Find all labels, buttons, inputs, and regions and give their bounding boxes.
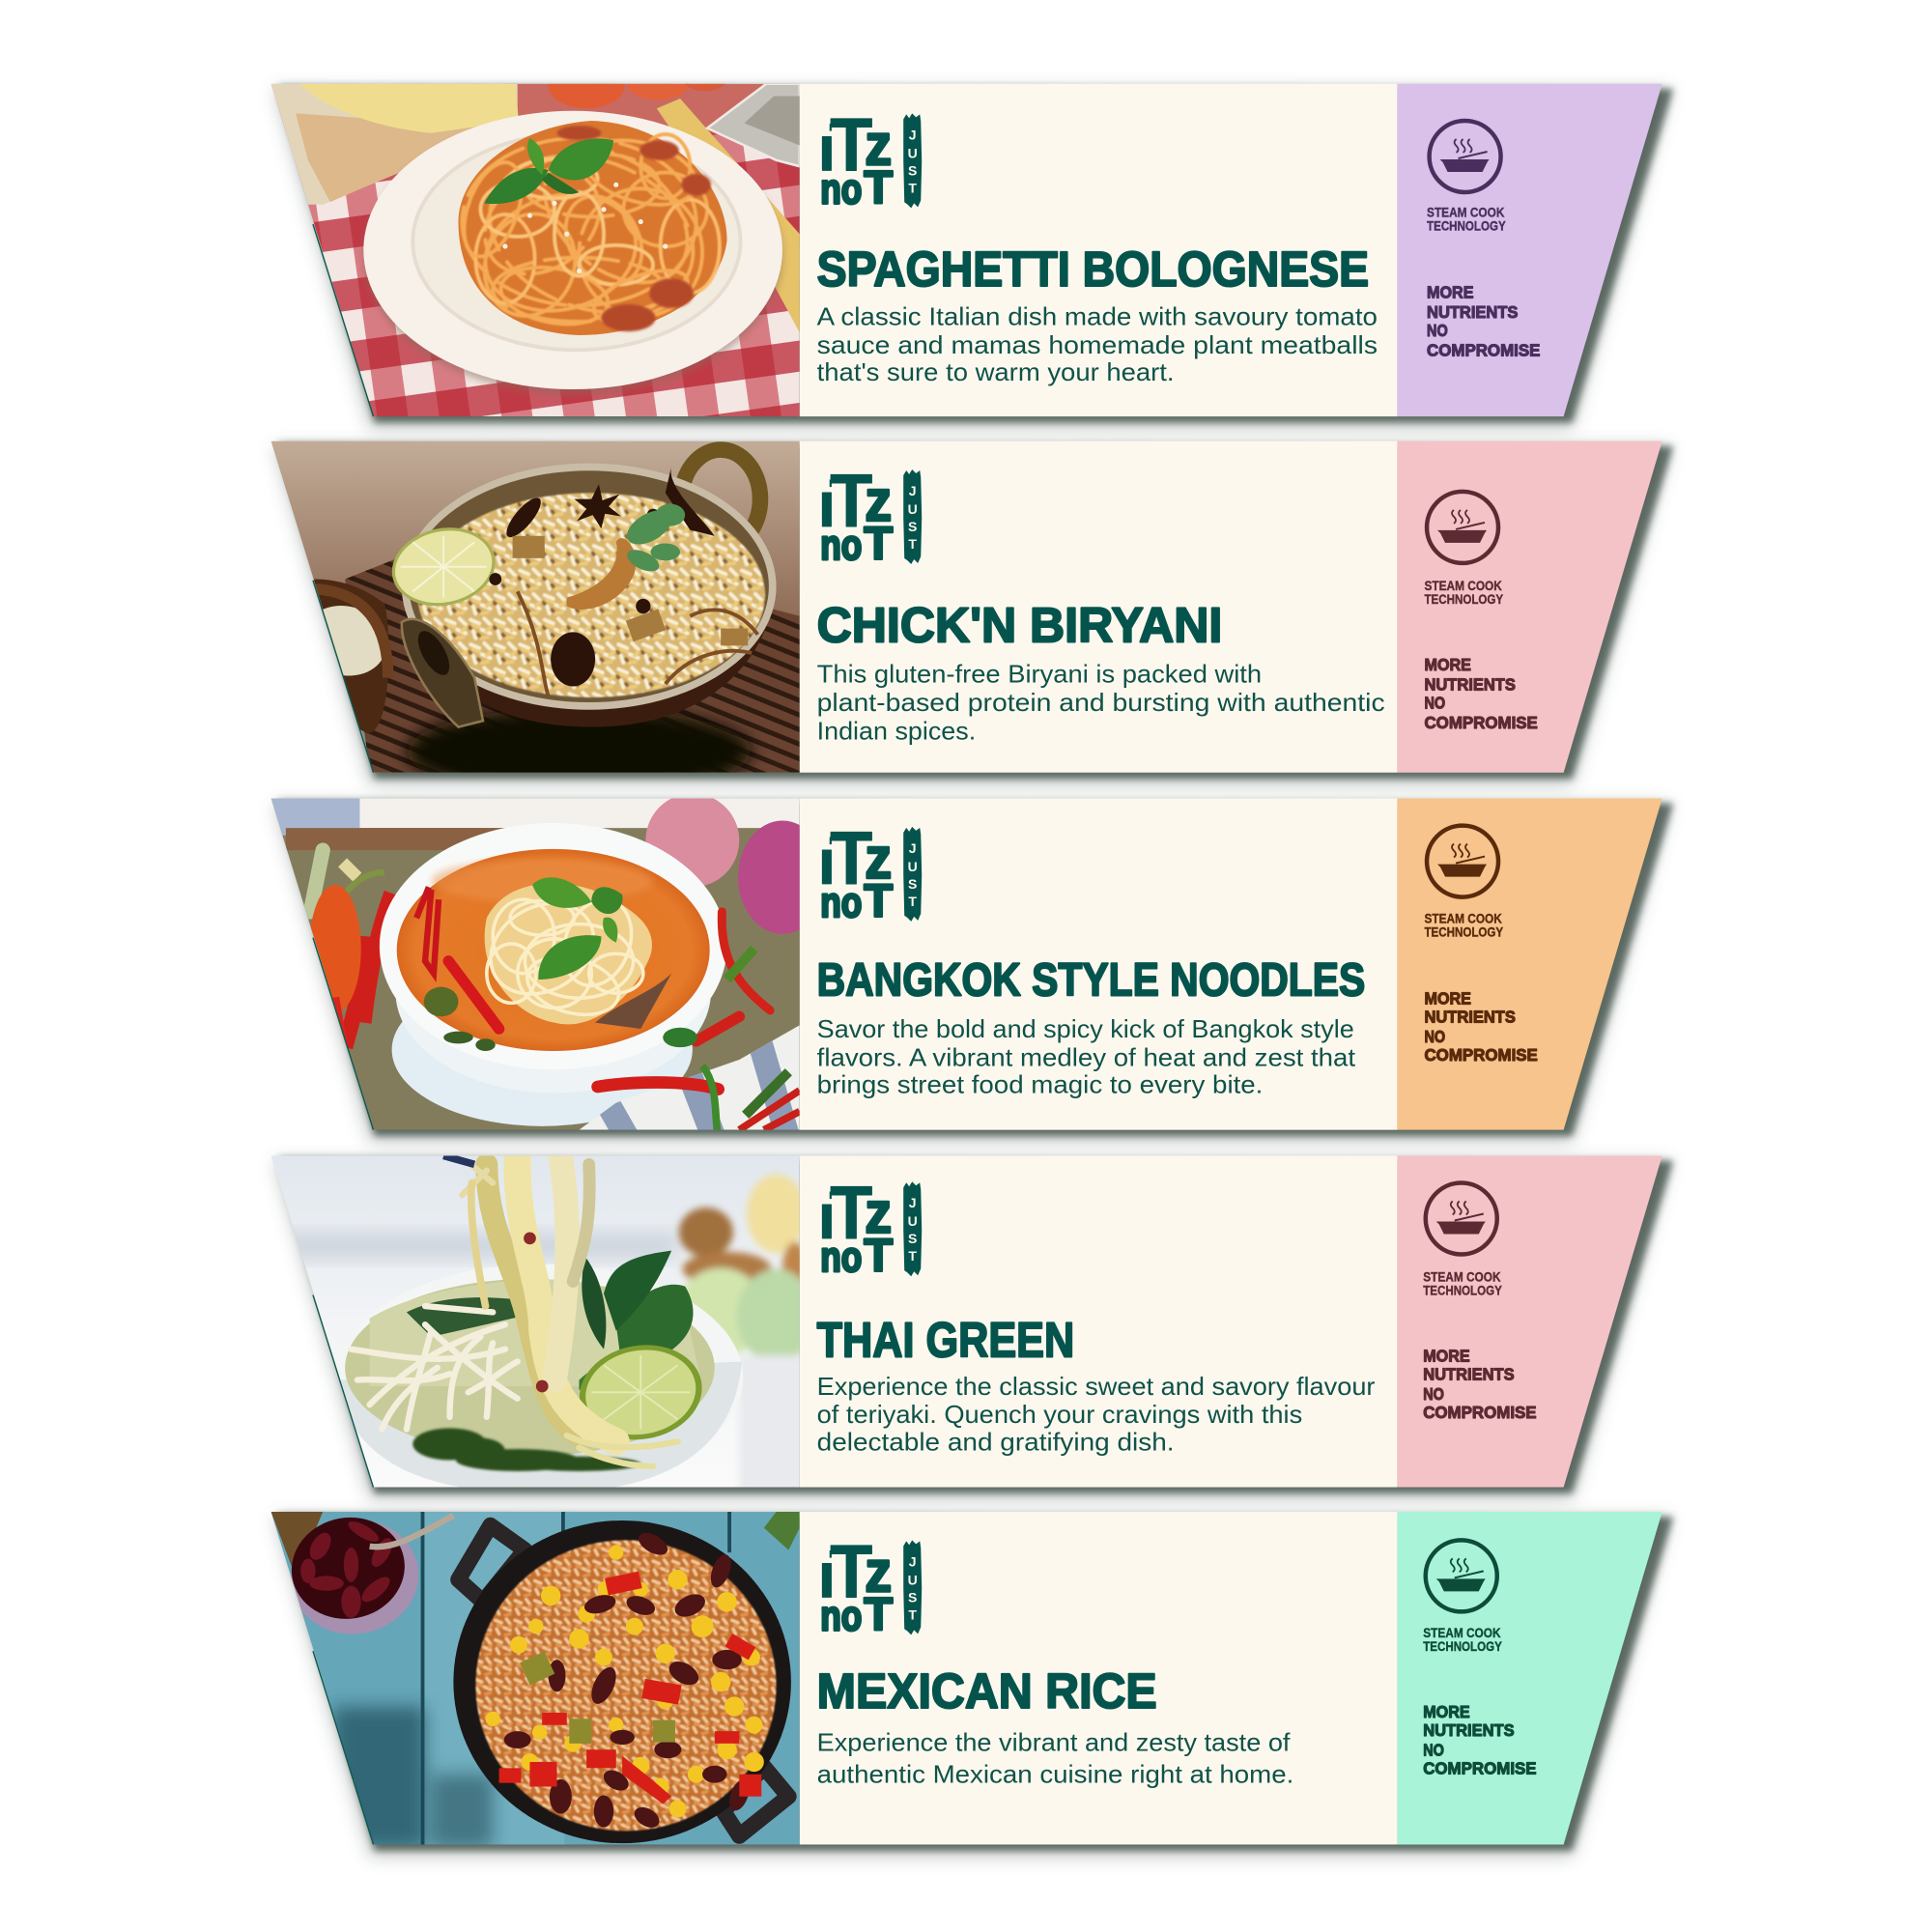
text panel background <box>800 1512 1397 1844</box>
icon: steam cook bowl <box>1430 121 1501 192</box>
side panel: mint <box>1397 1512 1662 1844</box>
label: steam cook technology <box>1423 1269 1502 1298</box>
logo: iTz noT Just: T <box>830 458 872 543</box>
logo: iTz noT Just <box>813 1528 922 1640</box>
logo: iTz noT Just: JUST <box>908 1553 918 1622</box>
claim: more nutrients no compromise: NUTRIENTS <box>1427 302 1519 322</box>
logo: iTz noT Just: T <box>830 1528 872 1613</box>
dish title: MEXICAN RICE <box>817 1663 1157 1719</box>
label: steam cook technology: TECHNOLOGY <box>1427 218 1506 234</box>
claim: more nutrients no compromise: COMPROMISE <box>1423 1403 1537 1422</box>
logo: iTz noT Just: no <box>820 879 862 926</box>
label: steam cook technology: STEAM COOK <box>1423 1625 1501 1640</box>
dish title: BANGKOK STYLE NOODLES <box>817 954 1365 1007</box>
logo: iTz noT Just: no <box>820 1592 862 1639</box>
claim: more nutrients no compromise: NO <box>1424 1027 1445 1046</box>
label: steam cook technology: TECHNOLOGY <box>1423 1283 1502 1298</box>
logo: iTz noT Just <box>813 1170 922 1282</box>
logo: iTz noT Just <box>813 101 922 213</box>
soft shadows behind cards <box>273 86 1673 1857</box>
logo: iTz noT Just: no <box>820 1234 862 1281</box>
claim: more nutrients no compromise: COMPROMISE <box>1423 1759 1537 1778</box>
side panel: orange <box>1397 799 1662 1130</box>
logo: iTz noT Just <box>813 458 922 570</box>
icon: steam cook bowl <box>1426 1540 1497 1611</box>
dish title: THAI GREEN <box>817 1312 1074 1367</box>
claim: more nutrients no compromise <box>1423 1702 1537 1778</box>
logo: iTz noT Just: i <box>818 469 836 540</box>
description: delectable and gratifying dish. <box>817 1427 1175 1456</box>
logo: iTz noT Just: no <box>820 522 862 569</box>
logo: iTz noT Just: JUST <box>908 483 918 552</box>
label: steam cook technology: STEAM COOK <box>1423 1269 1501 1285</box>
description: of teriyaki. Quench your cravings with this <box>817 1400 1302 1429</box>
icon: steam cook bowl <box>1427 492 1498 563</box>
description: Indian spices. <box>817 716 976 745</box>
panel: mexican rice <box>271 1506 1662 1848</box>
logo: iTz noT Just: JUST <box>908 1195 918 1264</box>
description: flavors. A vibrant medley of heat and zest that <box>817 1042 1356 1071</box>
claim: more nutrients no compromise: NUTRIENTS <box>1423 1720 1515 1740</box>
logo: iTz noT Just: JUST <box>908 840 918 909</box>
logo: iTz noT Just: T <box>864 1231 893 1282</box>
icon: steam cook bowl <box>1426 1182 1497 1254</box>
description: authentic Mexican cuisine right at home. <box>817 1760 1293 1789</box>
logo: iTz noT Just: T <box>830 1170 872 1255</box>
claim: more nutrients no compromise: NUTRIENTS <box>1424 1008 1516 1027</box>
photo: thai green noodles <box>271 1155 815 1493</box>
claim: more nutrients no compromise: COMPROMISE <box>1424 713 1538 732</box>
logo: iTz noT Just: T <box>864 1589 893 1640</box>
panel: spaghetti bolognese <box>265 64 1662 416</box>
label: steam cook technology <box>1423 1625 1502 1654</box>
claim: more nutrients no compromise: NO <box>1423 1384 1444 1404</box>
label: steam cook technology: STEAM COOK <box>1427 204 1504 219</box>
logo: iTz noT Just: z <box>865 469 892 533</box>
claim: more nutrients no compromise: MORE <box>1423 1346 1470 1365</box>
logo: iTz noT Just: i <box>818 1539 836 1610</box>
photo: spaghetti on white plate <box>265 64 807 416</box>
label: steam cook technology: STEAM COOK <box>1424 578 1502 593</box>
logo: iTz noT Just: T <box>864 519 893 570</box>
description: plant-based protein and bursting with authentic <box>817 688 1385 717</box>
logo: iTz noT Just: z <box>865 1539 892 1604</box>
logo: iTz noT Just: z <box>865 112 892 177</box>
description <box>817 1014 1356 1098</box>
dish title: CHICK'N BIRYANI <box>817 598 1222 653</box>
label: steam cook technology: STEAM COOK <box>1424 910 1502 925</box>
logo: iTz noT Just: i <box>818 112 836 184</box>
logo: iTz noT Just: z <box>865 826 892 891</box>
description: sauce and mamas homemade plant meatballs <box>817 330 1378 359</box>
logo: iTz noT Just: T <box>864 876 893 927</box>
logo: iTz noT Just: T <box>830 815 872 900</box>
description <box>817 1372 1376 1456</box>
description <box>817 302 1378 386</box>
claim: more nutrients no compromise <box>1423 1346 1537 1422</box>
label: steam cook technology <box>1424 910 1504 939</box>
photo: orange noodle soup <box>271 793 827 1140</box>
label: steam cook technology: TECHNOLOGY <box>1424 591 1504 607</box>
claim: more nutrients no compromise: MORE <box>1423 1702 1470 1721</box>
photo: biryani in copper bowl <box>271 441 800 796</box>
description <box>817 660 1385 745</box>
panel: chick'n biryani <box>271 441 1662 796</box>
text panel background <box>800 441 1397 773</box>
label: steam cook technology <box>1427 204 1506 234</box>
text panel background <box>800 799 1397 1130</box>
panel: bangkok style noodles <box>271 793 1662 1140</box>
claim: more nutrients no compromise: COMPROMISE <box>1424 1045 1538 1065</box>
logo: iTz noT Just: no <box>820 165 862 213</box>
description: Savor the bold and spicy kick of Bangkok style <box>817 1014 1354 1043</box>
text panel background <box>800 1155 1397 1488</box>
side panel: pink <box>1397 1155 1662 1488</box>
logo: iTz noT Just: T <box>830 101 872 186</box>
description <box>817 1727 1293 1789</box>
claim: more nutrients no compromise: NUTRIENTS <box>1424 674 1516 694</box>
claim: more nutrients no compromise: NO <box>1423 1741 1444 1760</box>
logo: iTz noT Just <box>813 815 922 927</box>
claim: more nutrients no compromise <box>1424 989 1538 1065</box>
label: steam cook technology: TECHNOLOGY <box>1424 923 1504 939</box>
text panel background <box>800 84 1397 416</box>
logo: iTz noT Just: i <box>818 826 836 897</box>
description: brings street food magic to every bite. <box>817 1069 1263 1098</box>
label: steam cook technology <box>1424 578 1504 607</box>
panel: thai green <box>271 1155 1662 1493</box>
dish title: SPAGHETTI BOLOGNESE <box>817 242 1369 297</box>
side panel: lilac <box>1397 84 1662 416</box>
logo: iTz noT Just: JUST <box>908 127 918 195</box>
claim: more nutrients no compromise <box>1424 655 1538 732</box>
icon: steam cook bowl <box>1427 826 1498 897</box>
logo: iTz noT Just: T <box>864 162 893 213</box>
label: steam cook technology: TECHNOLOGY <box>1423 1638 1502 1654</box>
claim: more nutrients no compromise <box>1427 283 1540 360</box>
logo: iTz noT Just: i <box>818 1180 836 1252</box>
description: This gluten-free Biryani is packed with <box>817 660 1262 689</box>
claim: more nutrients no compromise: MORE <box>1424 655 1471 674</box>
side panel: pink <box>1397 441 1662 773</box>
claim: more nutrients no compromise: NUTRIENTS <box>1423 1365 1515 1384</box>
description: A classic Italian dish made with savoury tomato <box>817 302 1378 331</box>
logo: iTz noT Just: z <box>865 1180 892 1245</box>
description: that's sure to warm your heart. <box>817 357 1175 386</box>
claim: more nutrients no compromise: MORE <box>1427 283 1474 302</box>
claim: more nutrients no compromise: NO <box>1427 321 1448 340</box>
photo: mexican rice in skillet <box>271 1506 800 1848</box>
claim: more nutrients no compromise: MORE <box>1424 989 1471 1009</box>
description: Experience the classic sweet and savory flavour <box>817 1372 1376 1401</box>
description: Experience the vibrant and zesty taste of <box>817 1727 1291 1756</box>
claim: more nutrients no compromise: NO <box>1424 693 1445 712</box>
claim: more nutrients no compromise: COMPROMISE <box>1427 341 1540 360</box>
